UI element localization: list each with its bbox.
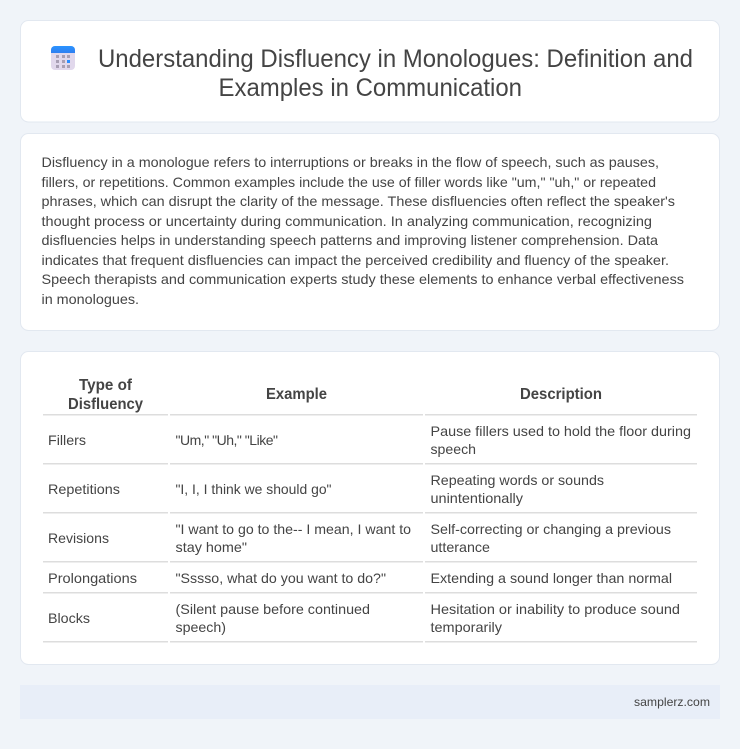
title: Understanding Disfluency in Monologues: Definition and: [98, 45, 693, 73]
paragraph text: disfluencies helps in understanding speech patterns and improving listener comprehension. Data: [42, 232, 658, 248]
row: blocks: (Silent pause before continued: [176, 601, 370, 617]
footer: [20, 685, 720, 719]
icon: calendar: [51, 46, 75, 70]
panel: intro paragraph: [20, 134, 720, 330]
row: revisions: Self-correcting or changing a previous: [430, 521, 671, 537]
row: revisions: "I want to go to the-- I mean, I want to: [176, 521, 411, 537]
paragraph text: indicates that frequent disfluencies can impact the perceived credibility and fluency of the speaker.: [42, 252, 669, 268]
row: repetitions: Repeating words or sounds: [430, 472, 604, 488]
row: repetitions: unintentionally: [430, 490, 523, 506]
footer: samplerz.com: [634, 695, 710, 709]
row: fillers: [43, 423, 697, 464]
row: blocks: Hesitation or inability to produce sound: [430, 601, 680, 617]
row: prolongations: [43, 570, 697, 594]
row: blocks: Blocks: [48, 610, 90, 626]
table header: Description: [520, 386, 602, 403]
panel: title card: [20, 20, 720, 122]
row: prolongations: Prolongations: [48, 570, 137, 586]
title: [98, 45, 693, 102]
table header: [43, 377, 697, 416]
panel: disfluency table: [20, 352, 720, 664]
row: repetitions: "I, I, I think we should go": [176, 481, 332, 497]
table header: Example: [266, 386, 327, 403]
row: blocks: temporarily: [430, 619, 502, 635]
paragraph text: [42, 154, 684, 307]
paragraph text: Speech therapists and communication experts study these elements to enhance verbal effectiveness: [42, 271, 684, 287]
row: prolongations: Extending a sound longer than normal: [430, 570, 672, 586]
row: repetitions: [43, 472, 697, 514]
row: fillers: Pause fillers used to hold the floor during: [430, 423, 691, 439]
title: Examples in Communication: [218, 74, 522, 102]
row: fillers: "Um," "Uh," "Like": [176, 432, 278, 448]
row: fillers: Fillers: [48, 432, 86, 448]
table header: Type of: [79, 377, 133, 394]
row: prolongations: "Sssso, what do you want to do?": [176, 570, 386, 586]
row: repetitions: Repetitions: [48, 481, 120, 497]
row: revisions: Revisions: [48, 530, 109, 546]
paragraph text: phrases, which can disrupt the clarity of the message. These disfluencies often reflect the speaker's: [42, 193, 675, 209]
row: blocks: speech): [176, 619, 226, 635]
row: revisions: [43, 521, 697, 562]
row: fillers: speech: [430, 441, 476, 457]
paragraph text: in monologues.: [42, 291, 139, 307]
row: revisions: utterance: [430, 539, 490, 555]
row: revisions: stay home": [176, 539, 247, 555]
paragraph text: Disfluency in a monologue refers to interruptions or breaks in the flow of speech, such as pauses,: [42, 154, 659, 170]
row: blocks: [43, 601, 697, 642]
paragraph text: fillers, or repetitions. Common examples include the use of filler words like "um," "uh," or repeated: [42, 174, 656, 190]
table header: Disfluency: [68, 396, 143, 413]
paragraph text: thought process or uncertainty during communication. In analyzing communication, recognizing: [42, 213, 652, 229]
